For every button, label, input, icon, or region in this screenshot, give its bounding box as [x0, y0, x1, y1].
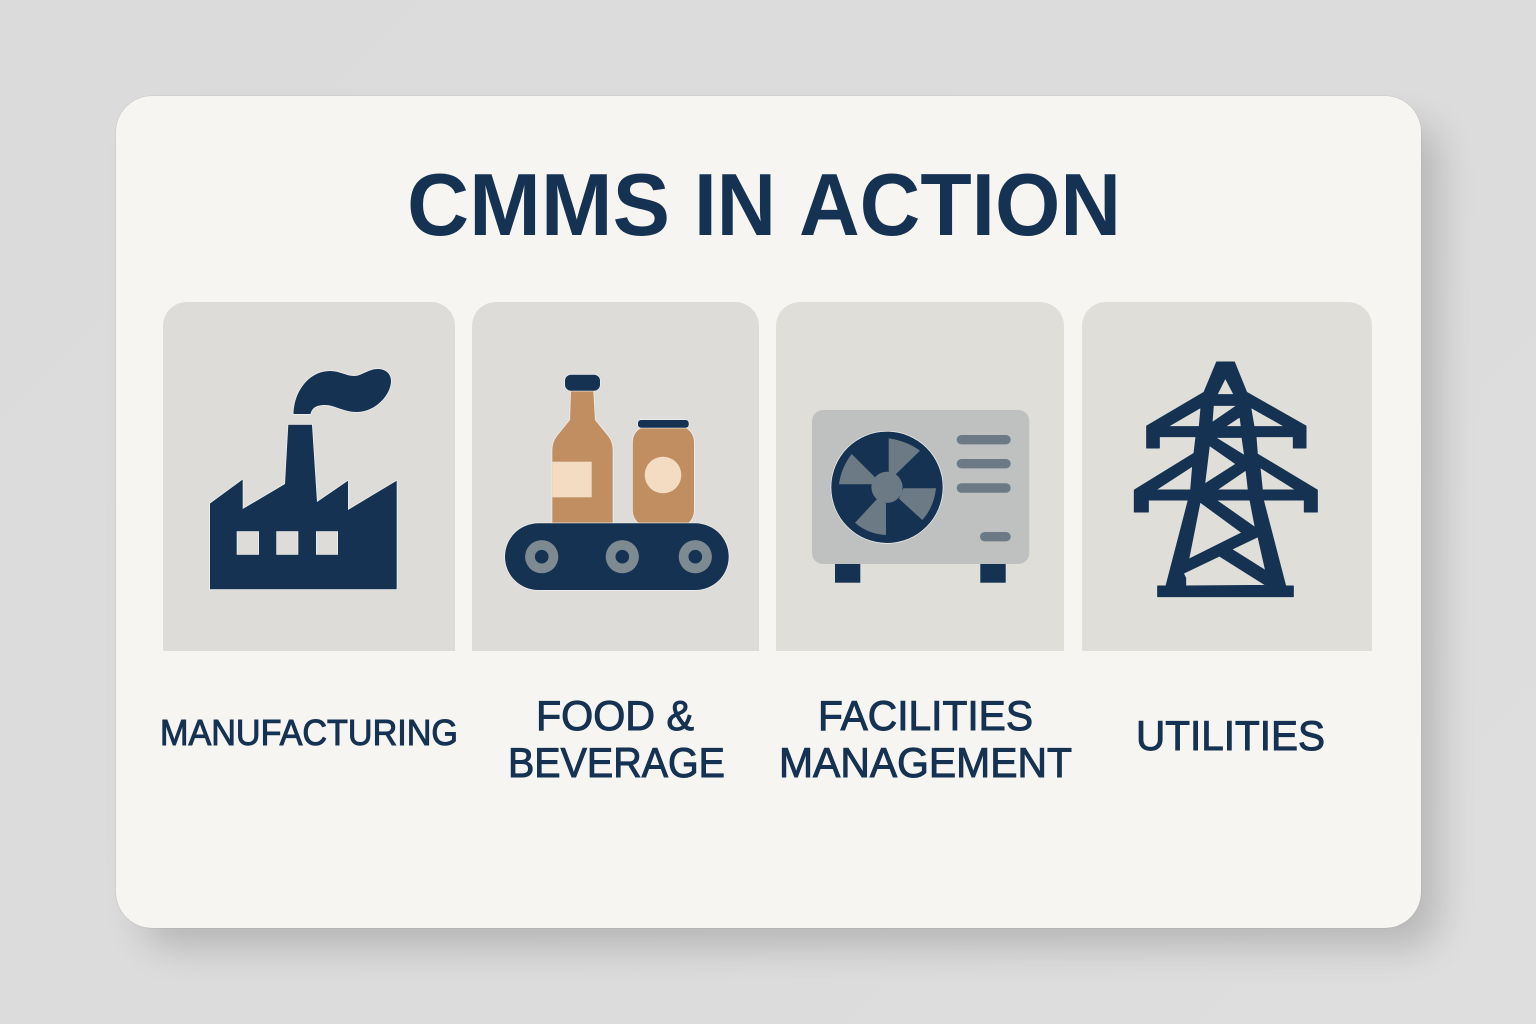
title: IN — [694, 155, 776, 254]
title: CMMS — [407, 155, 670, 254]
label: manufacturing: MANUFACTURING — [160, 712, 458, 753]
hvac foot right — [980, 564, 1006, 583]
factory building — [210, 425, 397, 589]
conveyor wheel right — [679, 540, 712, 573]
panel: manufacturing tile — [163, 302, 455, 651]
label: facilities management — [779, 692, 1072, 786]
fan blades — [839, 438, 936, 535]
icon: transmission tower — [1134, 362, 1317, 597]
title: ACTION — [799, 155, 1121, 254]
panel: facilities management tile — [776, 302, 1064, 651]
panel: main card — [116, 96, 1421, 928]
label: facilities management: FACILITIES — [818, 692, 1033, 739]
label: food and beverage — [508, 692, 725, 786]
icon: bottle and jar on conveyor — [505, 375, 729, 590]
icon: factory — [210, 369, 397, 589]
conveyor wheel left — [525, 540, 558, 573]
bottle cap — [565, 375, 600, 391]
label: utilities: UTILITIES — [1136, 712, 1325, 759]
panel: food and beverage tile — [472, 302, 759, 651]
label: facilities management: MANAGEMENT — [779, 739, 1072, 786]
label: food and beverage: BEVERAGE — [508, 739, 725, 786]
bottle — [552, 390, 613, 524]
title — [407, 155, 1121, 254]
jar lid — [638, 420, 689, 428]
conveyor wheel middle — [606, 540, 639, 573]
label: food and beverage: FOOD & — [536, 692, 694, 739]
bottle label — [552, 462, 592, 497]
vent bars — [957, 435, 1011, 541]
factory smoke — [294, 369, 391, 414]
icon: hvac unit — [812, 410, 1029, 583]
jar — [633, 428, 694, 524]
panel: utilities tile — [1082, 302, 1372, 651]
hvac body — [812, 410, 1029, 564]
hvac foot left — [835, 564, 860, 583]
fan housing — [831, 432, 943, 543]
conveyor belt — [505, 523, 729, 590]
jar label — [645, 457, 681, 493]
